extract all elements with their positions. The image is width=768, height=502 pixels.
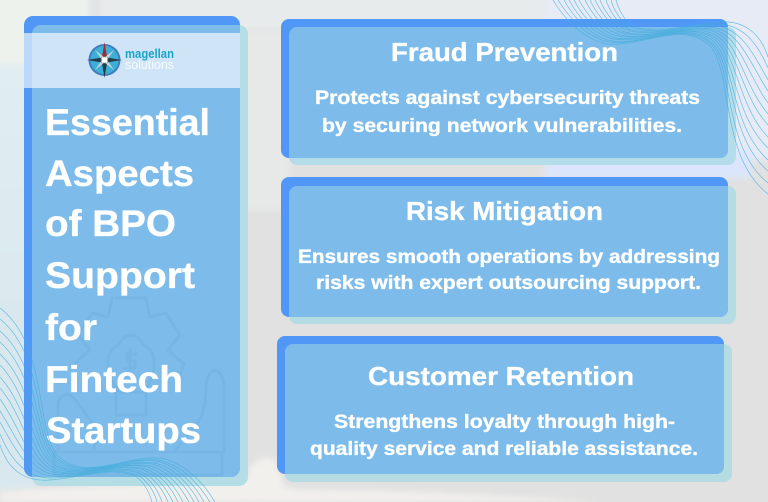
panel: Fraud Prevention [281, 19, 736, 165]
panel: Risk Mitigation [281, 177, 736, 324]
body text [298, 247, 720, 294]
body text [310, 412, 698, 460]
panel: Customer Retention [277, 336, 732, 482]
body text: quality service and reliable assistance. [310, 439, 698, 460]
heading: Fraud Prevention [391, 37, 618, 67]
body text [315, 88, 700, 137]
body text: Strengthens loyalty through high- [334, 412, 675, 433]
panel: title sidebar [24, 16, 248, 486]
logo wordmark: solutions [125, 58, 174, 72]
title: of BPO [45, 203, 176, 244]
title [45, 102, 210, 451]
title: Essential [45, 102, 210, 143]
decoration: line wave bottom left [0, 308, 215, 502]
body text: by securing network vulnerabilities. [322, 116, 682, 137]
heading: Customer Retention [368, 361, 634, 391]
heading: Risk Mitigation [406, 196, 603, 226]
title: Aspects [45, 153, 194, 194]
logo band [24, 33, 240, 88]
logo wordmark [125, 47, 174, 72]
body text: risks with expert outsourcing support. [316, 273, 701, 294]
body text: Protects against cybersecurity threats [315, 88, 700, 109]
title: for [45, 307, 97, 348]
decoration: line wave top right [553, 0, 768, 194]
logo wordmark: magellan [125, 47, 174, 61]
title: Support [45, 255, 195, 296]
icon: watermark gear, money bag and hands [54, 298, 224, 475]
title: Fintech [45, 359, 183, 400]
body text: Ensures smooth operations by addressing [298, 247, 720, 268]
icon: compass logo [87, 42, 122, 78]
title: Startups [46, 410, 201, 451]
